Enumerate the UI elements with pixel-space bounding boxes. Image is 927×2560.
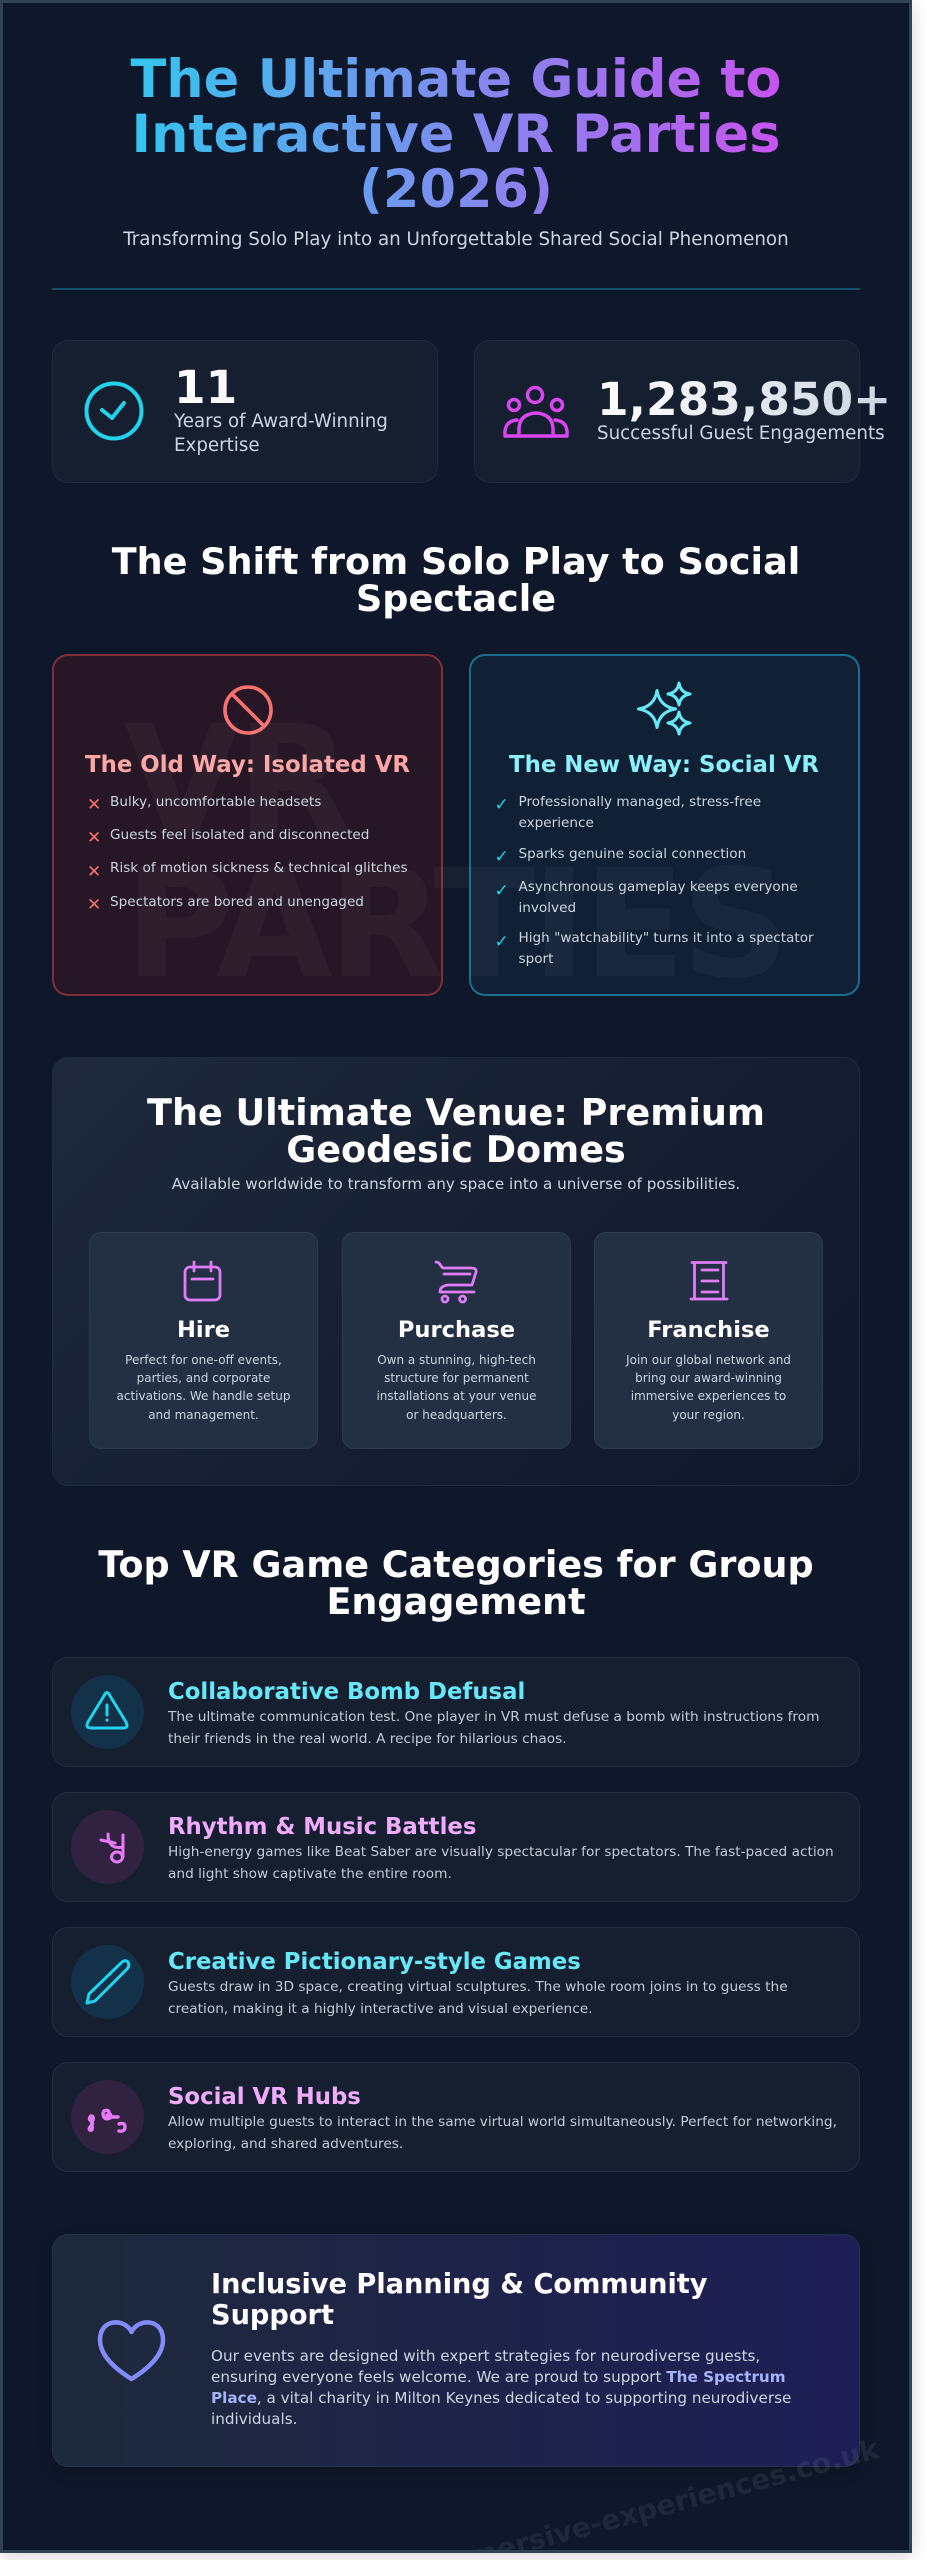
card: purchase: Purchase (398, 1317, 515, 1343)
card: purchase: or headquarters. (406, 1408, 507, 1422)
panel: collaborative bomb defusal: Collaborative Bomb Defusal (168, 1679, 525, 1705)
panel: creative pictionary-style games: creation, making it a highly interactive and visual experience. (168, 2001, 593, 2017)
panel: collaborative bomb defusal: their friends in the real world. A recipe for hilarious chaos. (168, 1731, 567, 1747)
old way list: ✕ (87, 795, 101, 815)
title: (2026) (359, 159, 553, 220)
old way list (87, 794, 408, 915)
old way list: ✕ (87, 895, 101, 915)
venue subtitle: Available worldwide to transform any space into a universe of possibilities. (172, 1175, 740, 1193)
old way list: Spectators are bored and unengaged (110, 894, 364, 910)
panel: social vr hubs: exploring, and shared adventures. (168, 2136, 403, 2152)
icon: people (503, 386, 569, 438)
icon: calendar (184, 1260, 222, 1302)
watermark: vr parties: PARTIES (124, 838, 786, 1012)
stat label: engagements: Successful Guest Engagements (597, 423, 885, 444)
old way list: ✕ (87, 828, 101, 848)
card: hire: Perfect for one-off events, (125, 1353, 282, 1367)
new way list: ✓ (494, 932, 509, 952)
heading: the shift (112, 540, 800, 620)
old way heading: The Old Way: Isolated VR (85, 752, 410, 778)
heading: game categories: Engagement (326, 1580, 586, 1623)
venue heading: Geodesic Domes (286, 1128, 626, 1171)
panel: social vr hubs: Social VR Hubs (168, 2084, 361, 2110)
card: franchise: bring our award-winning (635, 1371, 782, 1385)
new way list: Sparks genuine social connection (518, 846, 746, 862)
new way list: Asynchronous gameplay keeps everyone (518, 879, 798, 895)
panel: social vr hubs (52, 2062, 860, 2172)
icon: heart (98, 2320, 166, 2382)
new way list: ✓ (494, 880, 509, 900)
icon: social hub (71, 2080, 144, 2154)
panel: creative pictionary-style games (52, 1927, 860, 2037)
panel: the new way (468, 654, 860, 996)
title: Interactive VR Parties (132, 104, 780, 165)
card: purchase: structure for permanent (384, 1371, 529, 1385)
inclusive text: individuals. (211, 2410, 297, 2428)
heading: the shift: The Shift from Solo Play to Social (112, 540, 800, 583)
venue heading (147, 1091, 765, 1171)
stat number: 1,283,850+: 1,283,850+ (597, 372, 891, 426)
new way list: involved (518, 900, 576, 916)
watermark: vr parties (124, 694, 786, 1012)
stat number: 11 (174, 362, 514, 412)
panel: creative pictionary-style games: Guests draw in 3D space, creating virtual sculptures. The whole room joins in to guess the (168, 1979, 788, 1995)
card: purchase: Own a stunning, high-tech (377, 1353, 536, 1367)
card: hire (89, 1232, 318, 1449)
heading: game categories: Top VR Game Categories for Group (98, 1543, 814, 1586)
stat label: years: Years of Award-Winning (174, 411, 388, 432)
panel: rhythm and music battles: High-energy games like Beat Saber are visually spectacular for spectators. The fast-paced action (168, 1844, 834, 1860)
panel: the old way (52, 654, 443, 996)
title (52, 52, 860, 217)
old way list: Bulky, uncomfortable headsets (110, 794, 321, 810)
card: hire: activations. We handle setup (117, 1389, 290, 1403)
panel: premium geodesic domes (52, 1057, 860, 1486)
panel: inclusive planning (52, 2234, 860, 2467)
panel: collaborative bomb defusal (52, 1657, 860, 1767)
card: franchise: immersive experiences to (631, 1389, 786, 1403)
stat label: years (174, 411, 388, 456)
icon: check circle (84, 382, 144, 440)
old way list: Guests feel isolated and disconnected (110, 827, 369, 843)
new way list: High "watchability" turns it into a spectator (518, 930, 814, 946)
card: franchise: Franchise (647, 1317, 770, 1343)
panel: creative pictionary-style games: Creative Pictionary-style Games (168, 1949, 581, 1975)
new way list: experience (518, 815, 594, 831)
new way list: sport (518, 951, 553, 967)
inclusive text: Our events are designed with expert strategies for neurodiverse guests, (211, 2347, 760, 2365)
card: purchase: installations at your venue (376, 1389, 537, 1403)
icon: sparkles (637, 682, 692, 736)
watermark: vr parties: VR (124, 694, 348, 868)
panel: rhythm and music battles (52, 1792, 860, 1902)
card: franchise: your region. (672, 1408, 745, 1422)
card: purchase (342, 1232, 571, 1449)
heading: the shift: Spectacle (356, 577, 556, 620)
icon: ban (223, 685, 273, 735)
inclusive text: ensuring everyone feels welcome. We are proud to support The Spectrum (211, 2368, 786, 2386)
inclusive text: Place, a vital charity in Milton Keynes dedicated to supporting neurodiverse (211, 2389, 791, 2407)
new way list (494, 794, 814, 967)
panel: rhythm and music battles: Rhythm & Music Battles (168, 1814, 476, 1840)
stat number: 11: 11 (174, 360, 237, 414)
panel: years of expertise stat (52, 340, 438, 483)
icon: warning triangle (71, 1675, 144, 1749)
inclusive heading: Support (211, 2300, 334, 2331)
card: franchise (594, 1232, 823, 1449)
card: hire: and management. (148, 1408, 259, 1422)
panel: rhythm and music battles: and light show captivate the entire room. (168, 1866, 452, 1882)
new way heading: The New Way: Social VR (509, 752, 819, 778)
new way list: ✓ (494, 847, 509, 867)
icon: building (690, 1261, 728, 1300)
subtitle: Transforming Solo Play into an Unforgettable Shared Social Phenomenon (123, 229, 789, 250)
icon: pencil (71, 1945, 144, 2019)
inclusive text (211, 2347, 791, 2428)
icon: cart (434, 1260, 478, 1304)
card: hire: parties, and corporate (137, 1371, 270, 1385)
panel: collaborative bomb defusal: The ultimate communication test. One player in VR must defuse a bomb with instructions from (168, 1709, 819, 1725)
panel: social vr hubs: Allow multiple guests to interact in the same virtual world simultaneously. Perfect for networking, (168, 2114, 837, 2130)
icon: music note (71, 1810, 144, 1884)
card: franchise: Join our global network and (626, 1353, 791, 1367)
panel: guest engagements stat (474, 340, 860, 483)
inclusive heading (211, 2269, 708, 2331)
venue heading: The Ultimate Venue: Premium (147, 1091, 765, 1134)
stat label: years: Expertise (174, 435, 260, 456)
title: The Ultimate Guide to (130, 49, 782, 110)
card: hire: Hire (177, 1317, 230, 1343)
new way list: ✓ (494, 795, 509, 815)
old way list: Risk of motion sickness & technical glitches (110, 860, 408, 876)
old way list: ✕ (87, 862, 101, 882)
inclusive heading: Inclusive Planning & Community (211, 2269, 708, 2300)
new way list: Professionally managed, stress-free (518, 794, 761, 810)
heading: game categories (98, 1543, 814, 1623)
